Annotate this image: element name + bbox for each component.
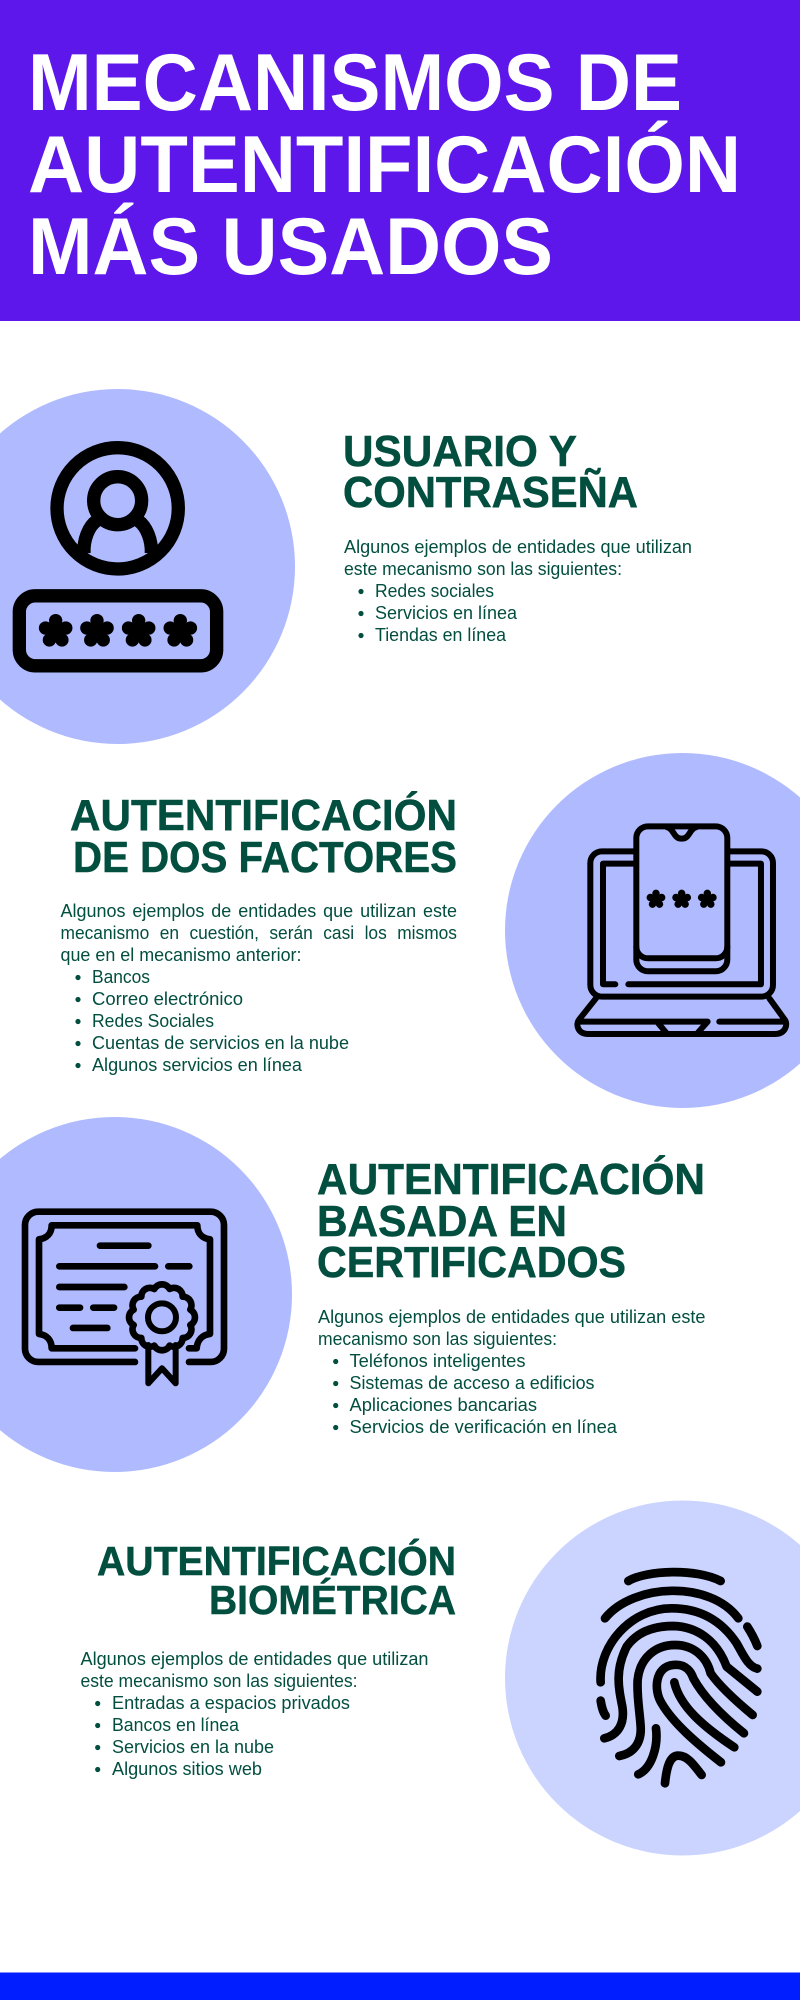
- text block: intro and list: Algunos ejemplos de entidades que utilizan este: [318, 1306, 706, 1327]
- text block: intro and list: este mecanismo son las siguientes:: [80, 1670, 358, 1691]
- text block: intro and list: este mecanismo son las siguientes:: [344, 558, 622, 579]
- header band: [0, 0, 800, 321]
- text block: intro and list: Bancos en línea: [112, 1714, 240, 1735]
- heading: autentificación biométrica: BIOMÉTRICA: [209, 1577, 456, 1623]
- text block: intro and list: Bancos: [92, 966, 150, 987]
- heading: autentificación basada en certificados: [317, 1154, 705, 1287]
- text block: intro and list: [80, 1648, 428, 1779]
- text block: intro and list: Servicios de verificación en línea: [350, 1416, 618, 1437]
- title: [28, 38, 741, 292]
- heading: usuario y contraseña: USUARIO Y: [343, 428, 577, 476]
- circle background 3: [0, 1117, 292, 1472]
- heading: autentificación basada en certificados: AUTENTIFICACIÓN: [317, 1154, 705, 1204]
- circle background 4: [505, 1500, 800, 1856]
- heading: autentificación biométrica: [97, 1538, 456, 1623]
- text block: intro and list: [318, 1306, 706, 1437]
- text block: intro and list: Algunos servicios en línea: [92, 1054, 303, 1075]
- icon: laptop and phone: [577, 826, 786, 1034]
- text block: intro and list: [344, 536, 692, 645]
- heading: autentificación de dos factores: AUTENTIFICACIÓN: [70, 790, 457, 840]
- panel: usuario y contraseña: [0, 389, 692, 744]
- footer band: [0, 1972, 800, 2000]
- icon: certificate: [25, 1212, 224, 1383]
- heading: autentificación de dos factores: [70, 790, 457, 882]
- text block: intro and list: Tiendas en línea: [375, 624, 507, 645]
- panel: autentificación de dos factores: [60, 753, 800, 1108]
- text block: intro and list: [60, 900, 457, 1075]
- text block: intro and list: Algunos ejemplos de entidades que utilizan este: [60, 900, 457, 921]
- text block: intro and list: Servicios en línea: [375, 602, 518, 623]
- heading: autentificación de dos factores: DE DOS FACTORES: [73, 834, 457, 882]
- icon: user and password: [19, 448, 217, 666]
- title: MECANISMOS DE: [28, 38, 682, 128]
- text block: intro and list: Entradas a espacios privados: [112, 1692, 350, 1713]
- text block: intro and list: que en el mecanismo anterior:: [60, 944, 302, 965]
- text block: intro and list: Algunos ejemplos de entidades que utilizan: [344, 536, 692, 557]
- text block: intro and list: Cuentas de servicios en la nube: [92, 1032, 349, 1053]
- heading: usuario y contraseña: CONTRASEÑA: [343, 467, 638, 517]
- title: MÁS USADOS: [28, 202, 553, 292]
- text block: intro and list: mecanismo en cuestión, serán casi los mismos: [60, 922, 457, 943]
- text block: intro and list: Sistemas de acceso a edificios: [350, 1372, 594, 1393]
- circle background 2: [505, 753, 800, 1108]
- heading: autentificación basada en certificados: BASADA EN: [317, 1198, 567, 1246]
- title: AUTENTIFICACIÓN: [28, 119, 741, 210]
- panel: autentificación basada en certificados: [0, 1117, 706, 1472]
- text block: intro and list: Teléfonos inteligentes: [350, 1350, 526, 1371]
- text block: intro and list: mecanismo son las siguientes:: [318, 1328, 557, 1349]
- panel: autentificación biométrica: [80, 1500, 800, 1856]
- text block: intro and list: Algunos ejemplos de entidades que utilizan: [80, 1648, 428, 1669]
- text block: intro and list: Servicios en la nube: [112, 1736, 274, 1757]
- text block: intro and list: Algunos sitios web: [112, 1758, 262, 1779]
- text block: intro and list: Redes sociales: [375, 580, 494, 601]
- heading: autentificación basada en certificados: CERTIFICADOS: [317, 1239, 626, 1287]
- text block: intro and list: Redes Sociales: [92, 1010, 214, 1031]
- text block: intro and list: Correo electrónico: [92, 988, 243, 1009]
- circle background 1: [0, 389, 295, 744]
- icon: fingerprint: [601, 1572, 757, 1783]
- heading: usuario y contraseña: [343, 428, 638, 517]
- text block: intro and list: Aplicaciones bancarias: [350, 1394, 537, 1415]
- heading: autentificación biométrica: AUTENTIFICACIÓN: [97, 1538, 456, 1584]
